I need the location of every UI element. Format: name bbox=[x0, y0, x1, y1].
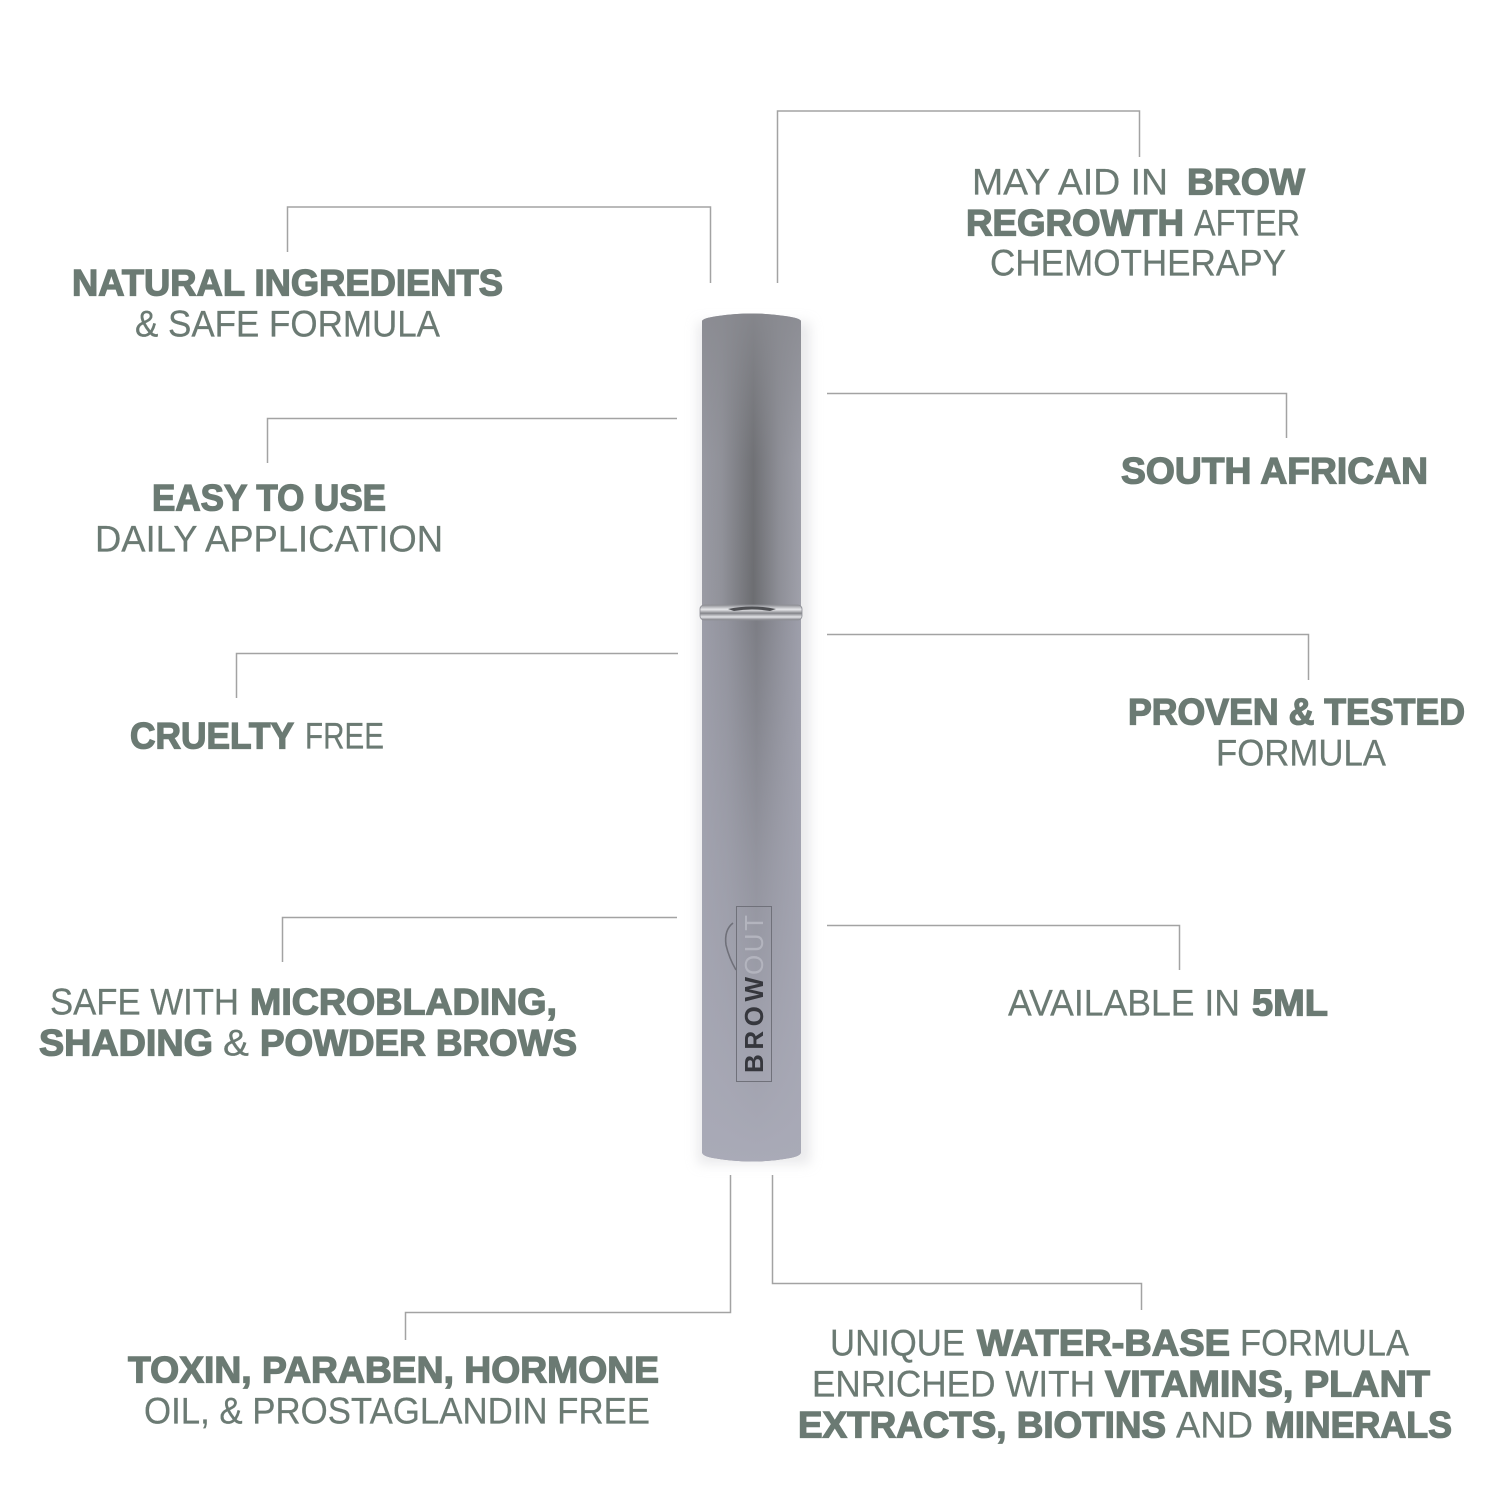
collar dark reflection bbox=[728, 606, 776, 611]
text: MAY AID IN bbox=[972, 161, 1168, 202]
leader line bbox=[827, 634, 1308, 680]
callout: proven and tested bbox=[827, 634, 1465, 773]
callout: toxin free bbox=[128, 1175, 730, 1431]
leader line bbox=[268, 418, 677, 463]
heading: SHADING bbox=[39, 1022, 213, 1063]
text: & SAFE FORMULA bbox=[135, 303, 440, 344]
leader line bbox=[282, 918, 677, 962]
leader line bbox=[772, 1175, 1142, 1310]
callout: brow regrowth bbox=[778, 111, 1305, 283]
callout: available in 5ml bbox=[827, 926, 1328, 1023]
heading: 5ML bbox=[1252, 982, 1328, 1023]
collar band bbox=[700, 605, 802, 620]
metal collar ring bbox=[700, 605, 802, 620]
text: ENRICHED WITH bbox=[812, 1363, 1095, 1404]
text: CHEMOTHERAPY bbox=[990, 242, 1286, 283]
heading: EASY TO USE bbox=[152, 477, 386, 518]
heading: PROVEN & TESTED bbox=[1128, 691, 1465, 732]
heading: REGROWTH bbox=[966, 202, 1184, 243]
heading: CRUELTY bbox=[130, 715, 294, 756]
text: FORMULA bbox=[1240, 1322, 1409, 1363]
heading: SOUTH AFRICAN bbox=[1121, 450, 1428, 491]
tube cap bbox=[702, 314, 801, 606]
tube shadow bbox=[698, 322, 810, 1164]
text: UNIQUE bbox=[830, 1322, 965, 1363]
callout: south african bbox=[827, 394, 1428, 491]
callout: cruelty free bbox=[130, 654, 678, 756]
logo frame bbox=[736, 906, 772, 1082]
logo brow swoosh bbox=[726, 923, 736, 970]
callout: safe with microblading bbox=[39, 918, 677, 1063]
heading: MICROBLADING, bbox=[250, 981, 557, 1022]
leader line bbox=[827, 926, 1180, 970]
text: AVAILABLE IN bbox=[1008, 982, 1240, 1023]
heading: NATURAL INGREDIENTS bbox=[72, 262, 503, 303]
heading: POWDER BROWS bbox=[260, 1022, 577, 1063]
text: FREE bbox=[305, 715, 384, 756]
leader line bbox=[406, 1175, 730, 1340]
text: & bbox=[223, 1022, 249, 1063]
callout: easy to use bbox=[95, 418, 677, 559]
tube lower body bbox=[702, 618, 801, 1162]
leader line bbox=[827, 394, 1286, 438]
logo word BROW: BROW bbox=[739, 977, 769, 1073]
text: AND bbox=[1176, 1404, 1253, 1445]
text: SAFE WITH bbox=[50, 981, 239, 1022]
text: OIL, & PROSTAGLANDIN FREE bbox=[144, 1390, 650, 1431]
text: DAILY APPLICATION bbox=[95, 518, 443, 559]
heading: VITAMINS, PLANT bbox=[1105, 1363, 1430, 1404]
callout: natural ingredients bbox=[72, 207, 710, 344]
heading: TOXIN, PARABEN, HORMONE bbox=[128, 1349, 659, 1390]
callout: water-base formula bbox=[772, 1175, 1452, 1445]
heading: BROW bbox=[1187, 161, 1305, 202]
heading: MINERALS bbox=[1265, 1404, 1452, 1445]
leader line bbox=[288, 207, 710, 283]
text: AFTER bbox=[1194, 202, 1300, 243]
heading: EXTRACTS, BIOTINS bbox=[798, 1404, 1166, 1445]
logo word OUT: OUT bbox=[739, 915, 769, 975]
leader line bbox=[236, 654, 678, 698]
tube lower body shading bbox=[702, 618, 801, 1162]
leader line bbox=[778, 111, 1140, 283]
product: mascara tube bbox=[698, 314, 810, 1164]
tube cap top shading bbox=[702, 314, 801, 606]
heading: WATER-BASE bbox=[977, 1322, 1230, 1363]
text: FORMULA bbox=[1216, 732, 1386, 773]
logo: BROW OUT bbox=[726, 906, 772, 1082]
